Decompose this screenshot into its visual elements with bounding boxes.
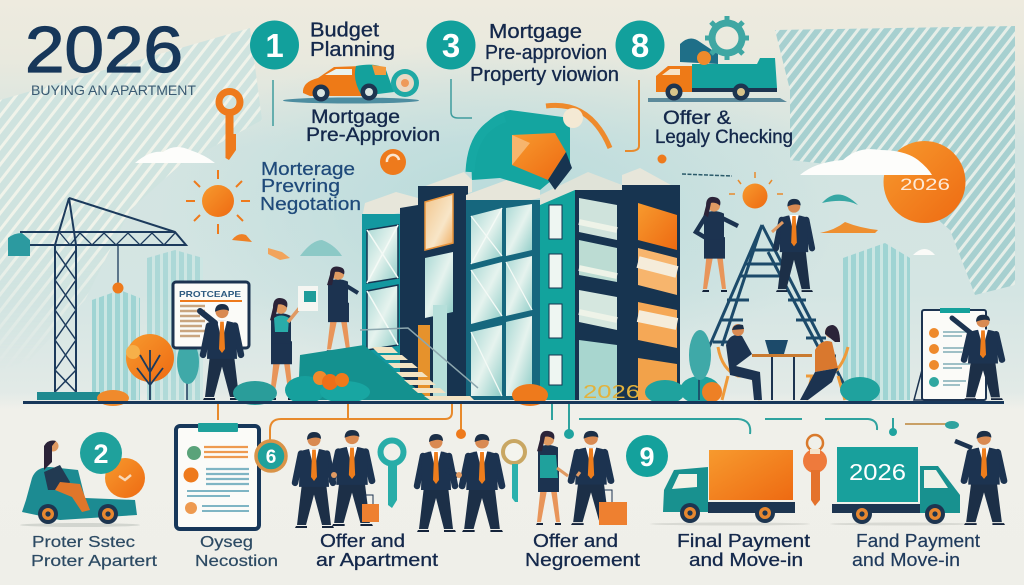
heading: offer and legal checking [655, 108, 793, 148]
caption: offer and apartment [316, 531, 438, 570]
key: teal [380, 440, 404, 508]
cloud right [800, 149, 932, 175]
badge 3 [426, 20, 476, 70]
badge 9: 9 [639, 442, 655, 472]
text: morterage preving negotation: Morterage [261, 159, 355, 179]
central apartment building [362, 105, 680, 400]
badge 6 [256, 441, 286, 471]
heading: mortgage pre-approvion [306, 107, 440, 146]
caption: Proter Sstec [32, 534, 135, 551]
key: orange hanging [803, 435, 827, 506]
bushes right [645, 330, 880, 404]
key: gold ring teal [503, 441, 525, 502]
heading: offer and legal checking: Legaly Checking [655, 127, 793, 148]
teal connectors [552, 404, 959, 439]
year sun label: 2026 [900, 175, 950, 194]
step 1 badge and heading [250, 20, 395, 70]
ladder [700, 225, 852, 400]
badge 1 [250, 20, 299, 70]
caption: fand payment and move-in: Fand Payment [856, 531, 980, 551]
teal moving truck [830, 447, 970, 526]
caption: oyseg necostion [195, 534, 278, 570]
ground line [23, 401, 1004, 404]
heading: budget planning: Planning [310, 39, 395, 61]
caption: Proter Apartert [31, 553, 158, 570]
text: morterage preving negotation: Prevring [261, 176, 340, 196]
connector under badge 8 [625, 80, 639, 151]
icon: cloud left [135, 147, 215, 163]
caption: oyseg necostion: Oyseg [200, 534, 253, 551]
connector under badge 1 [272, 80, 274, 126]
background tower middle [147, 250, 203, 400]
decorative small clouds right [682, 174, 935, 255]
bag [599, 490, 627, 525]
title [25, 13, 196, 98]
icon: car [283, 65, 419, 104]
pattern: left hatching [0, 28, 262, 321]
block C [466, 178, 540, 400]
connector under badge 3 [451, 79, 472, 118]
rider [44, 440, 90, 512]
teal moving truck: 2026 [849, 459, 906, 485]
step 2: vehicle scene [20, 432, 158, 570]
orange moving truck [650, 450, 810, 526]
chairs [718, 347, 848, 400]
woman and man handshake [536, 431, 627, 525]
billboard [173, 282, 249, 348]
woman on hill [326, 267, 358, 352]
handshake pair 2 [417, 434, 503, 532]
caption: final payment and move-in: and Move-in [689, 550, 803, 570]
year label on building: 2026 [583, 382, 640, 402]
caption [31, 534, 158, 570]
tree: orange [126, 334, 174, 400]
progress board right [914, 308, 986, 400]
caption: offer and apartment: ar Apartment [316, 550, 438, 570]
laptop [765, 340, 788, 354]
heading: mortgage pre-approvion property viowion: Property viowion [470, 64, 619, 86]
background tower left [92, 290, 140, 400]
text: morterage preving negotation [260, 159, 361, 214]
tree: teal [177, 340, 199, 400]
orange badge [105, 458, 145, 498]
caption: offer and negroement: Offer and [533, 531, 618, 551]
handshake pair 1 [295, 430, 379, 528]
seated man [726, 324, 762, 400]
title year: 2026 [25, 13, 183, 86]
icon: sun [186, 170, 250, 234]
step 8 badge: 8 [631, 27, 649, 64]
caption: fand payment and move-in [852, 531, 980, 570]
roof coin [563, 108, 583, 128]
person: man gesturing [955, 431, 1005, 525]
badge 1: 1 [265, 27, 284, 64]
block E [622, 168, 680, 400]
step 8 badge [616, 20, 664, 70]
icon: orange key [219, 92, 240, 160]
table [752, 354, 812, 400]
pattern: right hatching [775, 26, 1015, 295]
roof [470, 110, 572, 190]
year sun [884, 141, 966, 223]
icon: orange coin [380, 149, 406, 175]
small floating clouds [232, 234, 342, 260]
badge 3: 3 [442, 27, 460, 64]
caption: offer and apartment: Offer and [320, 531, 405, 551]
seated meeting [718, 324, 848, 400]
icon: orange dot [658, 154, 666, 164]
person: man at board [952, 315, 1003, 400]
woman with paper [269, 286, 318, 400]
woman standing [696, 197, 738, 292]
hill with stairs [298, 328, 478, 400]
badge 9 [626, 435, 668, 477]
billboard: PROTCEAPE [179, 289, 241, 299]
roof arrow [546, 105, 610, 148]
block B [418, 172, 472, 400]
badge 6: 6 [266, 447, 276, 468]
heading: mortgage pre-approvion property viowion: Pre-approvion [485, 42, 607, 64]
heading: mortgage pre-approvion property viowion: Mortgage [489, 21, 582, 43]
heading: mortgage pre-approvion: Pre-Approvion [306, 125, 440, 146]
negotiation pair with ball [696, 172, 813, 292]
background tower right [843, 243, 910, 400]
caption: offer and negroement [525, 531, 640, 570]
badge 2: 2 [93, 439, 109, 469]
orange connectors [218, 404, 466, 440]
seated woman [800, 325, 840, 400]
heading: mortgage pre-approvion property viowion [470, 21, 619, 86]
subtitle: BUYING AN APARTMENT [31, 82, 196, 98]
caption: offer and negroement: Negroement [525, 550, 640, 570]
heading: budget planning [310, 20, 395, 61]
person: man at billboard [200, 304, 242, 400]
man standing [772, 199, 813, 292]
step 3 badge and heading [426, 20, 619, 86]
text: morterage preving negotation: Negotation [260, 194, 361, 214]
crane [8, 198, 186, 400]
caption: final payment and move-in: Final Payment [677, 531, 810, 551]
checklist clipboard [176, 423, 259, 529]
block A [362, 192, 418, 400]
caption: fand payment and move-in: and Move-in [852, 550, 960, 570]
background glow [160, 40, 840, 380]
caption: oyseg necostion: Necostion [195, 553, 278, 570]
block D [540, 172, 622, 400]
heading: mortgage pre-approvion: Mortgage [311, 107, 400, 128]
heading: offer and legal checking: Offer & [663, 108, 731, 129]
caption: final payment and move-in [677, 531, 810, 570]
cloud and year sun [800, 141, 966, 223]
bag [362, 495, 379, 522]
heading: budget planning: Budget [310, 20, 379, 42]
bushes [97, 371, 548, 406]
icon: truck with gear [648, 16, 787, 102]
vehicle [20, 467, 140, 527]
glowing ball [729, 172, 783, 208]
